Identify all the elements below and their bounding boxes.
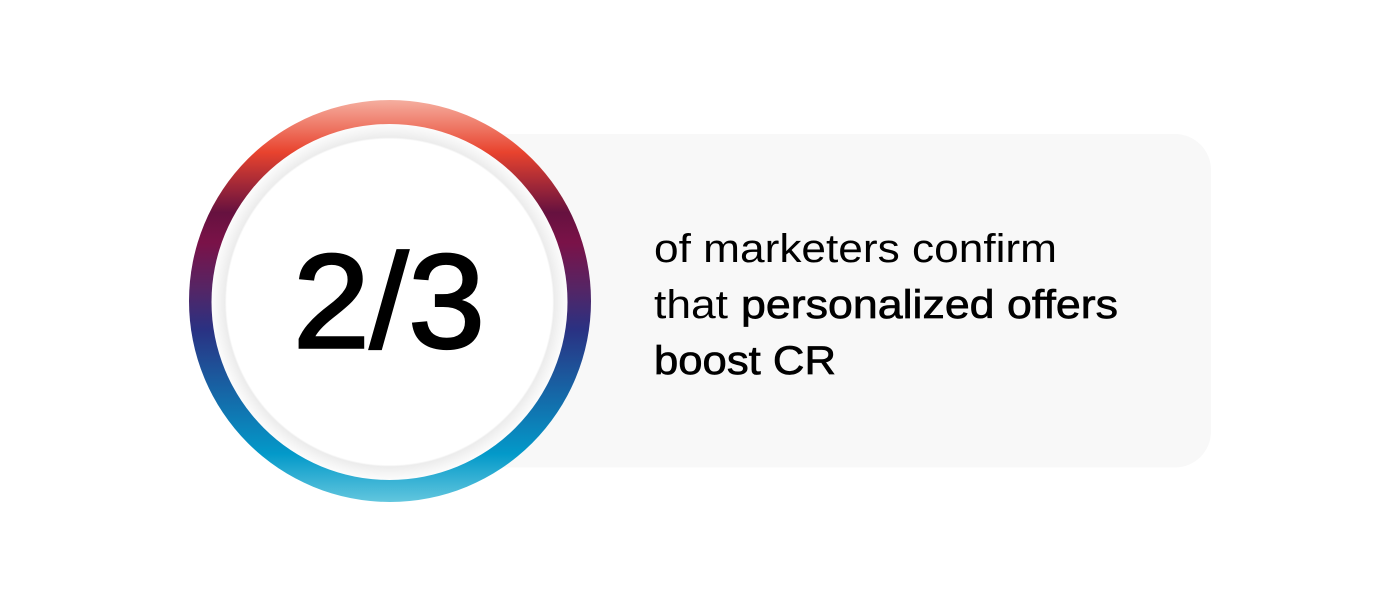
line 1: of marketers confirm: [654, 227, 1057, 271]
line 2: personalized offers: [741, 283, 1118, 327]
statement text: [654, 227, 1118, 383]
inner white disc: [212, 124, 568, 480]
ring: gradient circle: [189, 100, 591, 502]
line 2: that: [654, 283, 728, 327]
gradient ring badge: [189, 100, 591, 502]
line 3: boost CR: [654, 339, 836, 383]
panel: statement background: [400, 134, 1211, 468]
big number: 2/3: [293, 228, 485, 376]
